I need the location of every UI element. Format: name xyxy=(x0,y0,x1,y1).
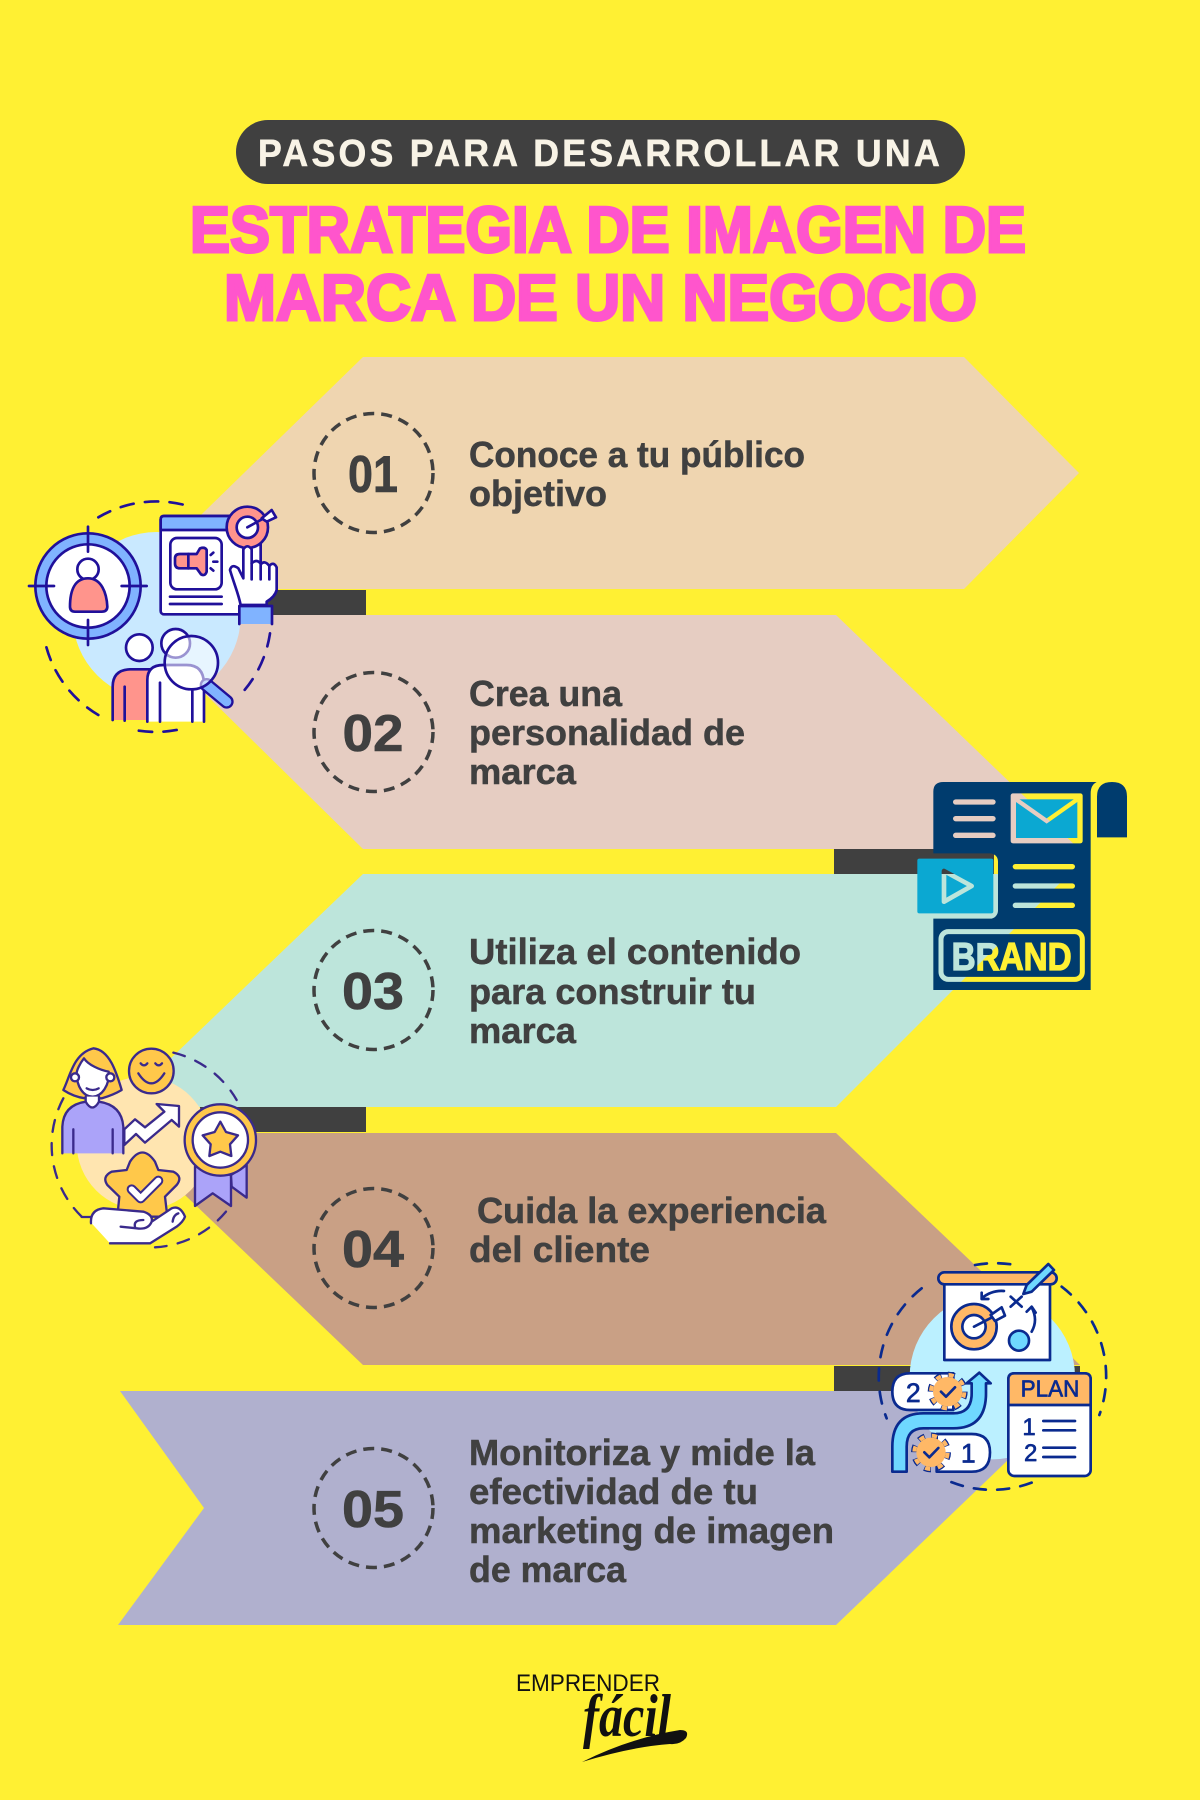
logo xyxy=(516,1670,687,1762)
panel: step 05: 05 xyxy=(342,1481,404,1539)
panel: step 04 xyxy=(120,1133,1080,1365)
panel: step 02: marca xyxy=(469,751,577,792)
panel: step 01: objetivo xyxy=(469,473,607,514)
subtitle pill xyxy=(236,120,965,184)
icon: plan: 1 xyxy=(1022,1414,1036,1441)
panel: step 05: marketing de imagen xyxy=(469,1510,834,1551)
panel: step 01: Conoce a tu público xyxy=(469,434,805,475)
panel: step 05: Monitoriza y mide la xyxy=(469,1432,816,1473)
icon: plan: PLAN xyxy=(1021,1376,1079,1402)
connector bars xyxy=(200,590,1080,1391)
panel: step 04: 04 xyxy=(342,1221,404,1279)
panel: step 02: 02 xyxy=(342,705,404,763)
panel: step 01: 01 xyxy=(348,446,398,504)
panel: step 02: personalidad de xyxy=(469,712,745,753)
panel: step 04: del cliente xyxy=(469,1229,650,1270)
panel: step 03: Utiliza el contenido xyxy=(469,931,801,972)
icon: plan: 1 xyxy=(961,1438,976,1468)
icon: plan: 2 xyxy=(906,1378,921,1408)
title: MARCA DE UN NEGOCIO xyxy=(224,261,977,334)
panel: step 02: Crea una xyxy=(469,673,623,714)
icon: brand document xyxy=(917,782,1127,990)
icon: customer experience xyxy=(52,1048,256,1247)
logo: fácil xyxy=(583,1683,671,1749)
panel: step 03: marca xyxy=(469,1010,577,1051)
panel: step 04: Cuida la experiencia xyxy=(477,1190,827,1231)
panel: step 01 xyxy=(125,357,1079,589)
icon: plan xyxy=(879,1263,1106,1490)
icon: target audience xyxy=(29,501,277,732)
title: ESTRATEGIA DE IMAGEN DE xyxy=(190,193,1026,266)
subtitle pill: PASOS PARA DESARROLLAR UNA xyxy=(258,133,943,175)
panel: step 02 xyxy=(125,615,1079,849)
panel: step 05: efectividad de tu xyxy=(469,1471,758,1512)
logo: EMPRENDER xyxy=(516,1670,660,1697)
panel: step 05: de marca xyxy=(469,1549,627,1590)
panel: step 03: para construir tu xyxy=(469,971,756,1012)
panel: step 03 xyxy=(120,874,1069,1107)
title xyxy=(190,193,1026,334)
panel: step 03: 03 xyxy=(342,963,404,1021)
panel: step 05 xyxy=(118,1391,1080,1625)
icon: plan: 2 xyxy=(1024,1440,1037,1467)
